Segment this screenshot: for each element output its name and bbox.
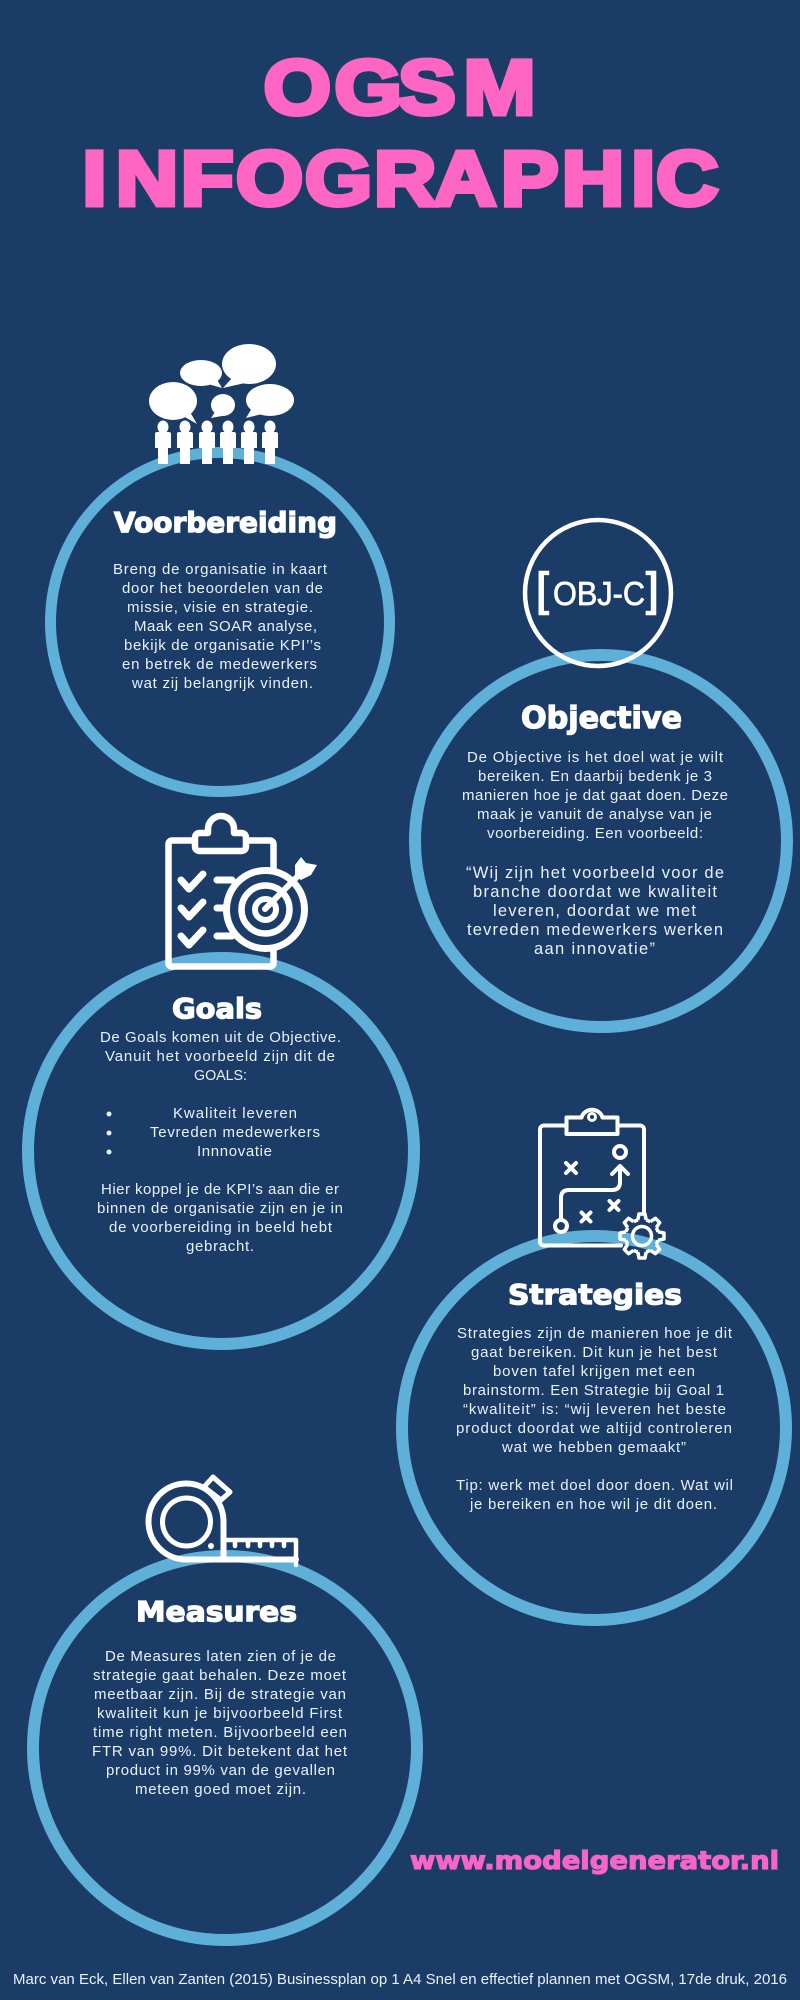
text block: meetbaar zijn. Bij de strategie van [94,1686,346,1703]
text block: strategie gaat behalen. Deze moet [93,1667,347,1684]
text block: bekijk de organisatie KPI’’s [124,637,321,654]
icon: OBJ-C badge: OBJ-C [553,575,645,612]
closing text [97,1181,343,1255]
heading: Objective [521,701,682,736]
panel: Voorbereiding [50,344,390,792]
text block: product in 99% van de gevallen [106,1762,335,1779]
closing text: Hier koppel je de KPI’s aan die er [101,1181,339,1198]
ring [50,452,390,792]
text block [462,749,728,842]
intro text: De Goals komen uit de Objective. [100,1029,341,1046]
tip [456,1477,733,1513]
quote: “Wij zijn het voorbeeld voor de [466,864,724,882]
website link: www.modelgenerator.nl [410,1846,779,1875]
icon: people with speech bubbles [149,344,294,464]
text block: boven tafel krijgen met een [493,1363,695,1380]
text block: missie, visie en strategie. [127,599,313,616]
heading: Measures [136,1595,297,1628]
closing text: de voorbereiding in beeld hebt [109,1219,333,1236]
title: OGSM [264,45,536,131]
text block: product doordat we altijd controleren [456,1420,732,1437]
source citation: Marc van Eck, Ellen van Zanten (2015) Businessplan op 1 A4 Snel en effectief plannen met OGSM, 17de druk, 2016 [13,1971,787,1988]
bullet list [106,1105,320,1160]
text block [92,1648,348,1798]
panel: Strategies [402,1110,786,1620]
intro text [100,1029,341,1084]
title [83,45,718,222]
text block: voorbereiding. Een voorbeeld: [487,825,703,842]
text block [113,561,328,692]
text block [456,1325,733,1456]
ring [33,1556,417,1940]
heading: Voorbereiding [114,506,337,539]
icon: strategy clipboard with gear [540,1110,664,1258]
tip: je bereiken en hoe wil je dit doen. [469,1496,717,1513]
text block: bereiken. En daarbij bedenk je 3 [478,768,712,785]
text block: kwaliteit kun je bijvoorbeeld First [97,1705,343,1722]
icon: OBJ-C badge: [ [536,563,549,615]
text block: door het beoordelen van de [122,580,323,597]
text block: time right meten. Bijvoorbeeld een [93,1724,347,1741]
closing text: gebracht. [186,1238,254,1255]
ring [415,655,787,1027]
tip: Tip: werk met doel door doen. Wat wil [456,1477,733,1494]
bullet list: Innnovatie [197,1143,272,1160]
quote: tevreden medewerkers werken [467,921,723,939]
quote: aan innovatie” [534,940,655,958]
icon: measuring tape [149,1477,296,1565]
text block: meteen goed moet zijn. [135,1781,306,1798]
quote: branche doordat we kwaliteit [473,883,717,901]
bullet list: Tevreden medewerkers [150,1124,320,1141]
intro text: GOALS: [194,1067,247,1084]
panel: Measures [33,1477,417,1940]
text block: FTR van 99%. Dit betekent dat het [92,1743,348,1760]
text block: wat we hebben gemaakt” [501,1439,686,1456]
text block: en betrek de medewerkers [122,656,317,673]
panel: Objective [415,520,787,1027]
panel: Goals [28,816,414,1344]
heading: Goals [172,992,262,1025]
text block: manieren hoe je dat gaat doen. Deze [462,787,728,804]
text block: Breng de organisatie in kaart [113,561,328,578]
title: INFOGRAPHIC [83,136,718,222]
icon: clipboard with target [168,816,317,966]
closing text: binnen de organisatie zijn en je in [97,1200,343,1217]
text block: wat zij belangrijk vinden. [131,675,313,692]
text block: De Objective is het doel wat je wilt [467,749,724,766]
quote: leveren, doordat we met [493,902,696,920]
text block: maak je vanuit de analyse van je [477,806,712,823]
icon: OBJ-C badge: ] [646,563,659,615]
text block: De Measures laten zien of je de [105,1648,336,1665]
text block: Strategies zijn de manieren hoe je dit [457,1325,733,1342]
quote [466,864,724,958]
icon: OBJ-C badge [525,520,671,666]
text block: brainstorm. Een Strategie bij Goal 1 [463,1382,724,1399]
heading: Strategies [508,1278,682,1311]
bullet list: Kwaliteit leveren [173,1105,297,1122]
text block: gaat bereiken. Dit kun je het best [471,1344,718,1361]
ring [402,1236,786,1620]
intro text: Vanuit het voorbeeld zijn dit de [105,1048,335,1065]
text block: Maak een SOAR analyse, [134,618,317,635]
ring [28,958,414,1344]
text block: “kwaliteit” is: “wij leveren het beste [463,1401,726,1418]
